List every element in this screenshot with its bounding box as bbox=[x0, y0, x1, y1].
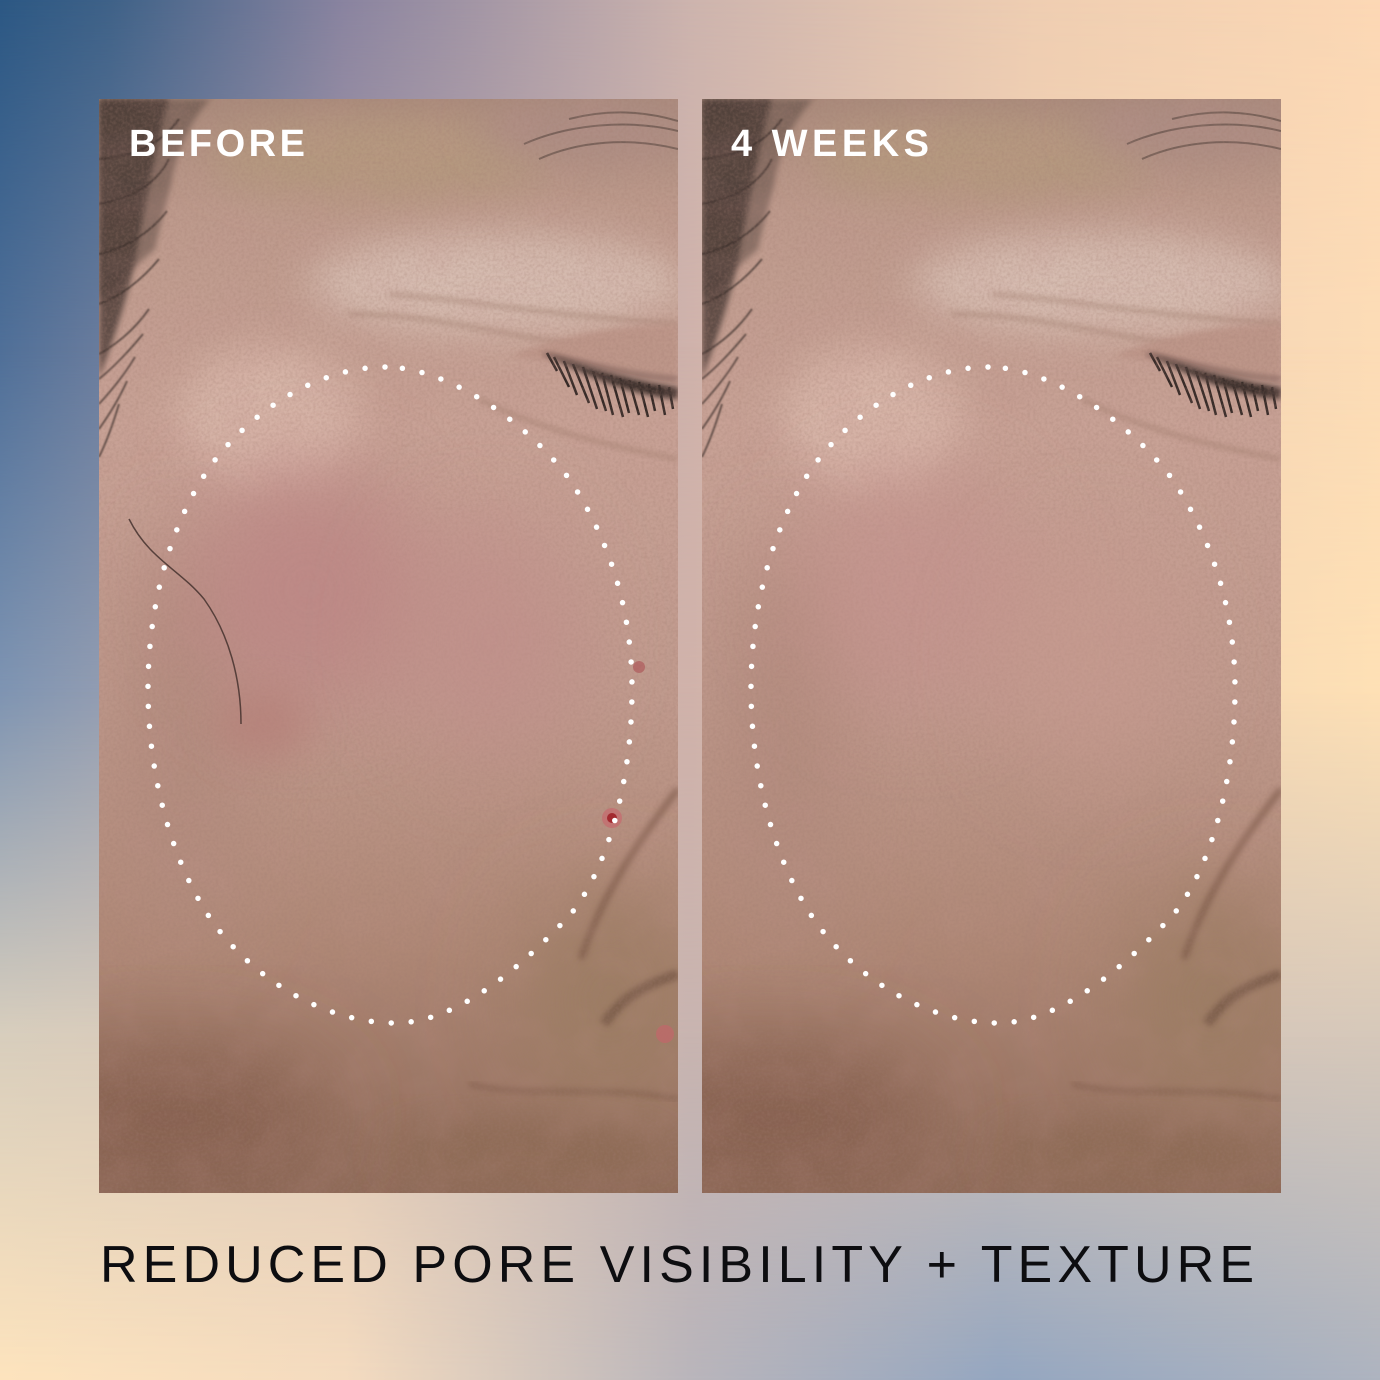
heading: result caption: REDUCED PORE VISIBILITY + TEXTURE bbox=[100, 1236, 1254, 1294]
softened cheek tone bbox=[897, 479, 955, 621]
label: 4 weeks: 4 WEEKS bbox=[731, 123, 929, 165]
dotted oval bbox=[148, 367, 632, 1023]
panel: 4 weeks photo bbox=[702, 99, 1281, 1193]
infographic artwork bbox=[99, 99, 1281, 1282]
dotted oval bbox=[751, 367, 1235, 1023]
panel: before photo bbox=[99, 99, 678, 1193]
red blemishes bbox=[129, 519, 674, 1043]
cheek redness bbox=[189, 469, 579, 759]
label: before: BEFORE bbox=[129, 123, 305, 165]
